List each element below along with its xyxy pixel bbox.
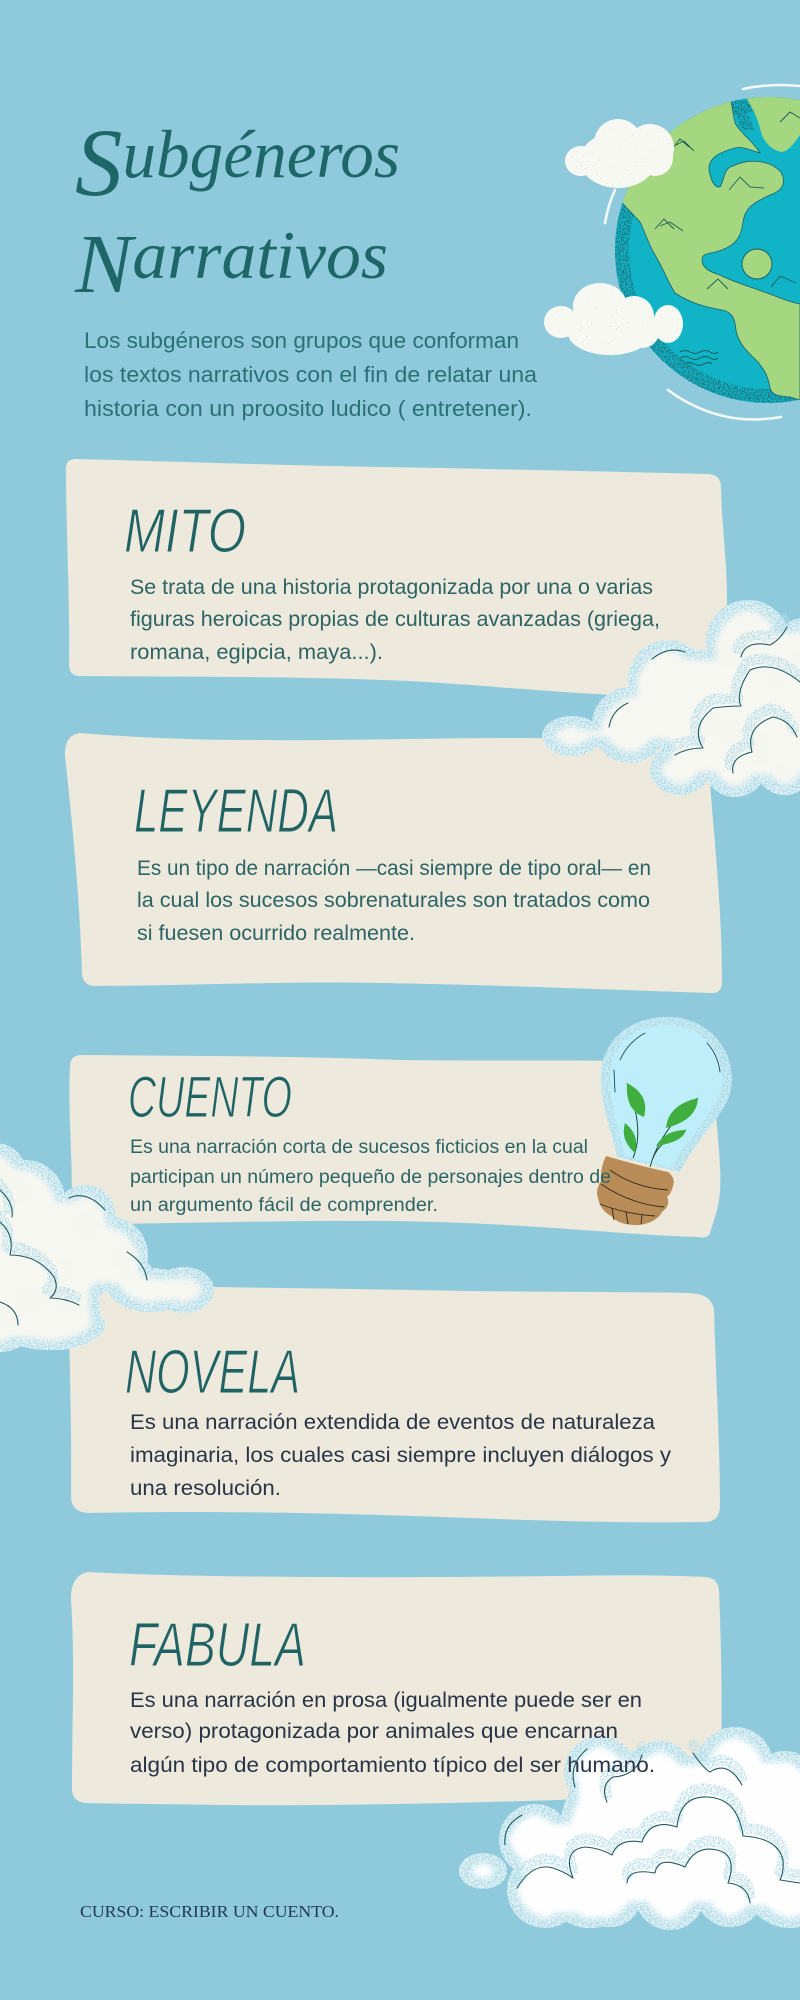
text: cuento description: Es una narración corta de sucesos ficticios en la cual (130, 1137, 588, 1158)
text: cuento description: un argumento fácil de comprender. (130, 1195, 438, 1216)
heading: cuento: CUENTO (128, 1065, 292, 1130)
text: fabula description: algún tipo de comportamiento típico del ser humano. (130, 1754, 655, 1777)
title line 2: N (74, 218, 136, 311)
panel: novela card (69, 1286, 720, 1522)
mountains and waves (655, 112, 800, 366)
heading: mito: MITO (124, 497, 246, 566)
text: fabula description (130, 1689, 655, 1777)
text: leyenda description (137, 857, 651, 945)
intro text: los textos narrativos con el fin de relatar una (84, 362, 538, 387)
panel: fabula card (71, 1572, 722, 1805)
icon: light bulb (597, 1017, 732, 1225)
lake (742, 249, 772, 279)
intro text (84, 328, 538, 421)
cloud upper (565, 119, 674, 188)
text: mito description: figuras heroicas propias de culturas avanzadas (griega, (130, 608, 660, 631)
title line 2: arrativos (132, 217, 388, 293)
panel: cuento card (69, 1055, 720, 1238)
main continent (610, 96, 800, 400)
cloud lower (544, 283, 683, 355)
title line 1: S (75, 109, 122, 216)
text: leyenda description: si fuesen ocurrido realmente. (137, 922, 415, 945)
text: leyenda description: la cual los sucesos sobrenaturales son tratados como (137, 889, 650, 912)
heading: leyenda: LEYENDA (134, 777, 338, 846)
leaves (624, 1083, 698, 1153)
icon: mito cloud (542, 600, 800, 797)
globe arcs (605, 85, 800, 419)
panel: mito card (66, 459, 727, 695)
pot (597, 1156, 674, 1225)
icon: bottom cloud (459, 1727, 800, 1930)
heading: fabula: FABULA (129, 1611, 306, 1680)
intro text: Los subgéneros son grupos que conforman (84, 328, 519, 353)
globe sphere (610, 90, 800, 410)
title line 1: ubgéneros (122, 116, 400, 192)
text: cuento description (130, 1137, 611, 1216)
title (74, 109, 400, 311)
stems (627, 1083, 698, 1167)
panel: leyenda card (65, 733, 722, 993)
text: leyenda description: Es un tipo de narración —casi siempre de tipo oral— en (137, 857, 651, 880)
text: mito description (130, 576, 660, 664)
text: fabula description: verso) protagonizada por animales que encarnan (130, 1720, 618, 1743)
icon: globe (544, 85, 800, 419)
icon: left cloud (0, 1143, 214, 1352)
text: fabula description: Es una narración en prosa (igualmente puede ser en (130, 1689, 642, 1712)
text: novela description (130, 1411, 672, 1500)
text: novela description: imaginaria, los cuales casi siempre incluyen diálogos y (130, 1444, 672, 1467)
text: novela description: Es una narración extendida de eventos de naturaleza (130, 1411, 655, 1434)
text: novela description: una resolución. (130, 1477, 281, 1500)
bulb glass (601, 1017, 732, 1172)
intro text: historia con un proosito ludico ( entretener). (84, 396, 532, 421)
heading: novela: NOVELA (125, 1338, 300, 1407)
footer text: CURSO: ESCRIBIR UN CUENTO. (80, 1902, 339, 1921)
text: cuento description: participan un número pequeño de personajes dentro de (130, 1167, 611, 1188)
text: mito description: Se trata de una historia protagonizada por una o varias (130, 576, 653, 599)
upper right land (746, 97, 800, 152)
text: mito description: romana, egipcia, maya...). (130, 641, 383, 664)
